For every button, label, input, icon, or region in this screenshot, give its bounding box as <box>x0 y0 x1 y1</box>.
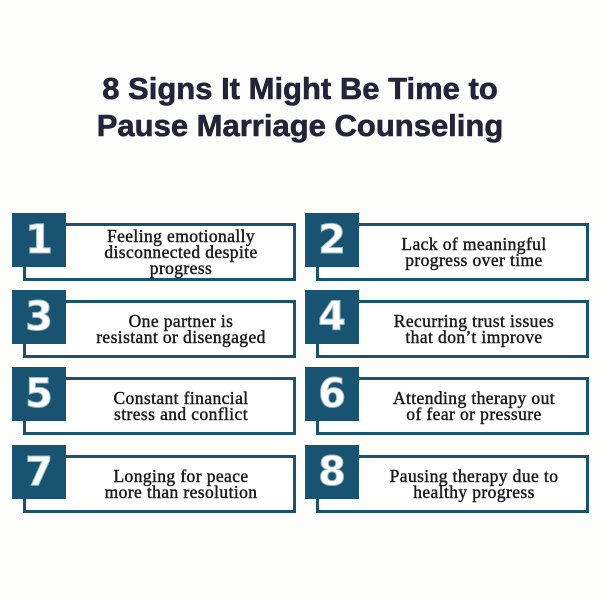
card 5 <box>12 367 296 435</box>
card 6: of fear or pressure <box>406 404 542 424</box>
card 3: 3 <box>25 294 53 340</box>
card 1: 1 <box>25 217 53 263</box>
card 1: Feeling emotionally <box>107 226 255 246</box>
card 2: progress over time <box>405 250 543 270</box>
card 2: 2 <box>318 217 346 263</box>
card 6: 6 <box>318 371 346 417</box>
title: 8 Signs It Might Be Time to <box>102 71 498 106</box>
card 6: Attending therapy out <box>393 388 555 408</box>
card 5: 5 <box>25 371 53 417</box>
card 5: Constant financial <box>113 388 248 408</box>
card 1 <box>12 213 296 281</box>
card 6 <box>305 367 589 435</box>
title: Pause Marriage Counseling <box>97 108 503 143</box>
title <box>97 71 503 143</box>
card 5: stress and conflict <box>114 404 248 424</box>
card 4: Recurring trust issues <box>394 311 554 331</box>
card 4: 4 <box>318 294 346 340</box>
card 7 <box>12 445 296 513</box>
card 1: disconnected despite <box>104 242 258 262</box>
card 2 <box>305 213 589 281</box>
card 8 <box>305 445 589 513</box>
card 3: One partner is <box>129 311 233 331</box>
card 4: that don’t improve <box>405 327 543 347</box>
card 8: 8 <box>318 449 346 495</box>
card 3 <box>12 290 296 358</box>
card 8: Pausing therapy due to <box>390 466 558 486</box>
card 7: Longing for peace <box>113 466 249 486</box>
card 7: more than resolution <box>105 482 257 502</box>
card 3: resistant or disengaged <box>96 327 266 347</box>
card 2: Lack of meaningful <box>401 234 547 254</box>
card 4 <box>305 290 589 358</box>
card 1: progress <box>150 258 212 278</box>
card 7: 7 <box>25 449 53 495</box>
card 8: healthy progress <box>413 482 535 502</box>
